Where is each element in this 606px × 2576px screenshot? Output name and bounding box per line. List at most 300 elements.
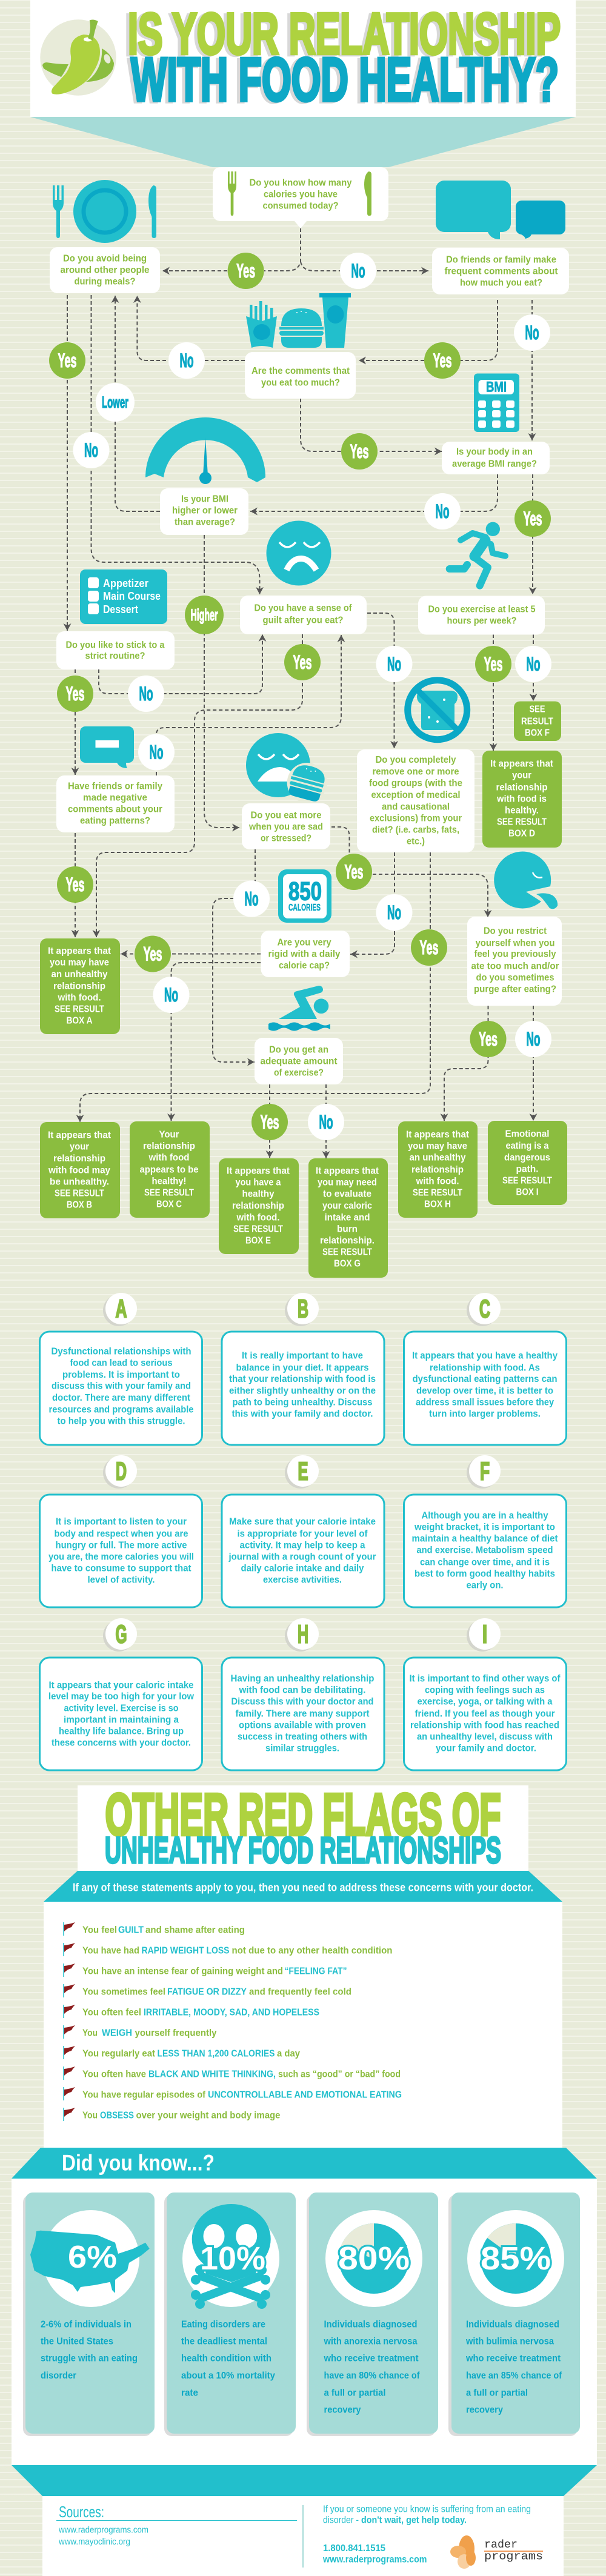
question: restrict or purge: yourself when you xyxy=(475,938,555,949)
result: box E: you have a xyxy=(235,1178,281,1187)
card: result I: It is important to find other ways of xyxy=(410,1673,561,1684)
logo: rader programs xyxy=(450,2535,543,2569)
card: result F: weight bracket, it is important to xyxy=(414,1522,555,1533)
result: box E: BOX E xyxy=(245,1236,271,1246)
question: remove food groups: diet? (i.e. carbs, fats, xyxy=(372,825,459,835)
icon: US map xyxy=(30,2231,150,2293)
card: result I: relationship with food has reached xyxy=(410,1721,559,1730)
answer: no xyxy=(514,314,550,351)
list item 1: You feel xyxy=(82,1925,117,1935)
icon: swimmer xyxy=(268,986,330,1031)
question: adequate exercise xyxy=(255,1038,343,1084)
result: box E xyxy=(219,1158,299,1254)
card: result C: develop over time, it is better to xyxy=(416,1386,553,1396)
result: box D: with food is xyxy=(496,794,547,805)
badge: letter H: H xyxy=(298,1620,308,1648)
question: guilt after eating: guilt after you eat? xyxy=(263,616,343,625)
card: 10 percent: health condition with xyxy=(181,2353,271,2364)
answer: yes: Yes xyxy=(484,653,503,675)
call to action: don't wait, get help today. xyxy=(361,2515,467,2525)
pie chart: 80 percent xyxy=(338,2223,410,2294)
card: result I: coping with feelings such as xyxy=(425,1685,545,1695)
card: result B: this with your family and doctor. xyxy=(231,1409,373,1419)
question: restrict or purge: purge after eating? xyxy=(474,984,556,995)
card: result D: you are, the more calories you will xyxy=(48,1552,194,1562)
list item 7: You regularly eat xyxy=(82,2049,156,2059)
card: result E xyxy=(222,1495,384,1607)
result: box H: BOX H xyxy=(424,1200,451,1209)
card: result I: exercise, yoga, or talking with a xyxy=(417,1696,553,1707)
list item 4: You sometimes feel xyxy=(82,1987,165,1997)
call to action: If you or someone you know is suffering from an eating xyxy=(323,2505,531,2514)
list item 6: WEIGH xyxy=(102,2028,132,2038)
question: adequate exercise: adequate amount xyxy=(261,1057,338,1066)
question: average BMI range: Is your body in an xyxy=(456,447,533,457)
answer: yes: Yes xyxy=(479,1028,498,1050)
question: restrict or purge: feel you previously xyxy=(474,949,556,960)
card: result C xyxy=(404,1332,566,1445)
result: box A: SEE RESULT xyxy=(55,1004,104,1014)
card: 10 percent: the deadliest mental xyxy=(181,2336,267,2347)
answer: yes: Yes xyxy=(293,651,311,673)
card: result G: important in maintaining a xyxy=(64,1715,179,1725)
answer: no xyxy=(340,253,376,289)
card: result G: these concerns with your doctor. xyxy=(52,1738,191,1748)
answer: yes xyxy=(57,866,93,903)
answer: yes: Yes xyxy=(236,260,255,282)
result: box H: with food. xyxy=(416,1177,459,1186)
answer: no xyxy=(168,342,205,379)
question: remove food groups: food groups (with the xyxy=(369,778,462,789)
title xyxy=(128,1,561,114)
card: 85 percent: recovery xyxy=(466,2405,503,2415)
question: friends comment on eating xyxy=(432,248,569,294)
question: remove food groups: etc.) xyxy=(407,836,425,847)
answer: yes xyxy=(57,676,93,712)
result: box H xyxy=(398,1121,478,1218)
answer: no xyxy=(128,676,164,712)
banner: address concerns with doctor xyxy=(44,1871,562,1902)
result: box C: with food xyxy=(148,1152,189,1163)
question: strict routine: Do you like to stick to a xyxy=(65,640,165,651)
result: box I: path. xyxy=(516,1164,538,1174)
question: negative comments xyxy=(56,775,175,832)
result: box I: dangerous xyxy=(504,1152,550,1163)
result: box F: SEE xyxy=(530,704,545,715)
list item 9 xyxy=(64,2087,402,2100)
answer: no xyxy=(73,432,109,468)
card: result D: hungry or full. The more active xyxy=(56,1540,187,1551)
list item 1: and shame after eating xyxy=(145,1925,245,1935)
list item 4: and frequently feel cold xyxy=(249,1987,351,1997)
badge: letter B: B xyxy=(298,1294,308,1323)
list item 3: “FEELING FAT” xyxy=(285,1967,347,1976)
answer: no: No xyxy=(387,653,401,675)
list item 6 xyxy=(64,2025,217,2039)
answer: no xyxy=(376,894,412,931)
icon: sad face xyxy=(267,521,331,585)
card: result I: your family and doctor. xyxy=(436,1744,536,1753)
card: result B: path to being unhealthy. Discuss xyxy=(233,1397,373,1408)
card: result H: Having an unhealthy relationship xyxy=(230,1673,375,1684)
card: result F: and exercise. Metabolism speed xyxy=(417,1545,553,1556)
icon: negative comment bubble xyxy=(80,726,134,768)
sources: www.raderprograms.com xyxy=(58,2525,148,2535)
question: strict routine xyxy=(56,631,175,669)
card: 85 percent: have an 85% chance of xyxy=(466,2371,562,2381)
result: box F xyxy=(514,702,561,741)
result: box G: BOX G xyxy=(334,1259,361,1269)
icon: vomiting face xyxy=(494,852,558,909)
question: guilt after eating xyxy=(240,596,367,634)
question: avoid other people xyxy=(50,247,160,293)
card: result I xyxy=(404,1658,566,1770)
card: 10 percent xyxy=(164,2193,296,2436)
icon: 850 calories: CALORIES xyxy=(288,903,321,913)
card: result C: relationship with food. As xyxy=(430,1363,540,1373)
result: box H: SEE RESULT xyxy=(413,1187,462,1198)
icon: fast food xyxy=(246,293,351,348)
list item 8: such as “good” or “bad” food xyxy=(278,2070,401,2079)
question: comments too much: you eat too much? xyxy=(261,378,340,388)
result: box A: relationship xyxy=(53,981,105,991)
answer: no: No xyxy=(387,901,401,923)
answer: no: No xyxy=(179,350,194,371)
answer: yes: Yes xyxy=(261,1111,279,1133)
question: avoid other people: Do you avoid being xyxy=(63,253,147,264)
card: 85 percent: Individuals diagnosed xyxy=(466,2319,559,2330)
badge: letter C xyxy=(467,1293,501,1326)
badge: letter F: F xyxy=(480,1456,490,1486)
answer: yes xyxy=(341,433,378,470)
result: box A: It appears that xyxy=(48,946,112,956)
panel: did you know xyxy=(12,2179,597,2465)
list item 7: LESS THAN 1,200 CALORIES xyxy=(158,2049,275,2059)
result: box H: you may have xyxy=(408,1141,467,1151)
question: rigid calorie cap: Are you very xyxy=(278,938,331,948)
result: box A: with food. xyxy=(58,992,101,1003)
card: 85 percent: who receive treatment xyxy=(465,2353,561,2364)
result: box E: It appears that xyxy=(227,1166,290,1177)
answer: yes xyxy=(514,500,551,537)
question: eat more when sad: Do you eat more xyxy=(251,811,322,820)
question: guilt after eating: Do you have a sense of xyxy=(255,603,352,613)
question: strict routine: strict routine? xyxy=(85,651,145,662)
icon: green knife xyxy=(364,171,371,216)
answer: yes xyxy=(470,1021,507,1057)
question: friends comment on eating: Do friends or family make xyxy=(446,254,556,265)
question: restrict or purge xyxy=(467,917,562,1006)
answer: yes xyxy=(424,342,461,379)
result: box G: relationship. xyxy=(320,1236,375,1246)
result: box B: SEE RESULT xyxy=(55,1189,104,1198)
badge: letter F xyxy=(467,1455,501,1489)
card: result G xyxy=(40,1658,202,1770)
answer: no xyxy=(515,646,551,682)
answer: higher: Higher xyxy=(190,606,218,624)
icon: 850 calories xyxy=(278,869,331,923)
answer: yes: Yes xyxy=(65,683,85,705)
result: box G: intake and xyxy=(325,1213,370,1223)
result: box C: relationship xyxy=(143,1141,195,1151)
result: box B: be unhealthy. xyxy=(50,1177,109,1187)
question: friends comment on eating: frequent comments about xyxy=(445,267,558,276)
card: result H: success in treating others with xyxy=(238,1731,367,1742)
answer: no xyxy=(308,1104,344,1140)
result: box B: with food may xyxy=(48,1166,110,1175)
badge: letter H xyxy=(285,1618,319,1651)
card: result G: It appears that your caloric intake xyxy=(48,1681,194,1690)
badge: letter B xyxy=(285,1293,319,1326)
card: 6 percent xyxy=(23,2193,155,2436)
card: result F: can change over time, and it is xyxy=(420,1557,550,1568)
answer: yes xyxy=(228,253,264,289)
call to action: 1.800.841.1515 xyxy=(323,2543,385,2554)
card: result C: It appears that you have a healthy xyxy=(412,1351,558,1361)
result: box A: BOX A xyxy=(67,1015,93,1026)
card: result F: early on. xyxy=(467,1580,503,1591)
result: box C xyxy=(130,1121,210,1218)
answer: no xyxy=(515,1021,551,1057)
header panel xyxy=(30,0,576,167)
question: remove food groups: remove one or more xyxy=(372,767,459,777)
list item 5: IRRITABLE, MOODY, SAD, AND HOPELESS xyxy=(144,2008,319,2017)
result: box I: BOX I xyxy=(516,1187,538,1197)
card: result F: best to form good healthy habits xyxy=(415,1569,555,1579)
result: box D: relationship xyxy=(496,783,548,792)
question: avoid other people: around other people xyxy=(61,265,150,275)
card: result B xyxy=(222,1332,384,1445)
card: 6 percent: 6% xyxy=(68,2240,117,2275)
question: calories consumed today: Do you know how many xyxy=(250,178,352,188)
result: box A: an unhealthy xyxy=(51,969,108,980)
list item 7 xyxy=(64,2046,300,2059)
answer: yes: Yes xyxy=(350,440,368,462)
card: 10 percent: rate xyxy=(181,2388,198,2398)
banner: did you know: Did you know...? xyxy=(62,2151,215,2175)
question: negative comments: comments about your xyxy=(68,805,162,814)
card: 10 percent: Eating disorders are xyxy=(181,2319,265,2330)
question: negative comments: made negative xyxy=(83,792,147,803)
card: 85 percent xyxy=(448,2193,580,2436)
card: result B: either slightly unhealthy or on the xyxy=(229,1386,376,1396)
question: average BMI range: average BMI range? xyxy=(452,459,537,469)
question: restrict or purge: Do you restrict xyxy=(484,926,547,937)
list item 10 xyxy=(64,2108,281,2121)
panel: red flags title xyxy=(78,1781,528,1871)
result: box G: It appears that xyxy=(316,1166,379,1177)
card: 80 percent: with anorexia nervosa xyxy=(324,2336,418,2347)
card: result H: Discuss this with your doctor and xyxy=(231,1696,373,1707)
icon: menu checklist: Main Course xyxy=(103,590,161,602)
badge: letter G: G xyxy=(115,1620,127,1648)
answer: yes xyxy=(336,854,372,890)
card: result G: level may be too high for your low xyxy=(48,1691,195,1702)
panel: red flags list xyxy=(44,1902,562,2148)
card: result F: maintain a healthy balance of diet xyxy=(412,1534,558,1544)
question: negative comments: Have friends or family xyxy=(68,782,162,791)
answer: yes xyxy=(251,1104,288,1140)
answer: no xyxy=(153,977,189,1013)
card: result E: activity. It may help to keep a xyxy=(240,1540,365,1551)
card: result A: discuss this with your family and xyxy=(52,1381,191,1391)
question: BMI higher or lower: higher or lower xyxy=(172,505,238,516)
icon: runner xyxy=(450,522,505,586)
answer: yes: Yes xyxy=(419,937,439,958)
card: 10 percent: about a 10% mortality xyxy=(181,2371,275,2381)
card: result E: exercise avtivities. xyxy=(263,1575,342,1585)
result: box D: SEE RESULT xyxy=(497,817,547,828)
result: box E: SEE RESULT xyxy=(233,1224,283,1235)
question: remove food groups xyxy=(357,749,474,852)
list item 4: FATIGUE OR DIZZY xyxy=(167,1987,247,1997)
result: box G xyxy=(308,1158,388,1278)
footer band xyxy=(12,2465,597,2496)
question: negative comments: eating patterns? xyxy=(80,815,150,826)
result: box F: BOX F xyxy=(525,728,550,738)
result: box C: Your xyxy=(159,1129,179,1140)
list item 10: You xyxy=(82,2111,98,2120)
badge: letter I: I xyxy=(482,1620,487,1648)
answer: no xyxy=(138,734,175,771)
answer: yes xyxy=(411,929,447,966)
list item 4 xyxy=(64,1984,351,1997)
answer: no: No xyxy=(319,1111,333,1133)
card: result E: journal with a rough count of your xyxy=(228,1552,376,1562)
card: result D: level of activity. xyxy=(87,1575,155,1585)
result: box D: your xyxy=(512,771,531,780)
panel: footer xyxy=(42,2496,564,2576)
icon: skull and crossbones xyxy=(191,2204,271,2309)
icon: menu checklist xyxy=(80,569,167,624)
sources: Sources: xyxy=(59,2503,104,2521)
logo: chili pepper xyxy=(40,19,116,96)
card: result A xyxy=(40,1332,202,1445)
badge: letter A: A xyxy=(115,1294,127,1323)
result: box F: RESULT xyxy=(521,716,553,727)
icon: menu checklist: Appetizer xyxy=(103,577,148,589)
card: result E: daily calorie intake and daily xyxy=(241,1563,364,1574)
question: friends comment on eating: how much you eat? xyxy=(460,277,542,288)
answer: yes: Yes xyxy=(65,874,85,895)
pie chart: 85 percent xyxy=(481,2223,551,2294)
list item 6: yourself frequently xyxy=(135,2028,217,2038)
card: result G: activity level. Exercise is so xyxy=(64,1704,179,1713)
result: box G: burn xyxy=(337,1224,358,1235)
question: adequate exercise: Do you get an xyxy=(269,1044,328,1055)
logo: rader programs: programs xyxy=(484,2551,543,2563)
card: result B: balance in your diet. It appears xyxy=(236,1363,369,1373)
question: comments too much: Are the comments that xyxy=(251,366,350,376)
list item 5: You often feel xyxy=(82,2008,141,2017)
result: box H: It appears that xyxy=(406,1129,470,1140)
card: result D: It is important to listen to your xyxy=(56,1517,187,1527)
question: average BMI range xyxy=(442,442,550,474)
result: box B: relationship xyxy=(53,1154,105,1164)
question: rigid calorie cap: calorie cap? xyxy=(279,961,330,971)
list item 8: BLACK AND WHITE THINKING, xyxy=(148,2070,276,2079)
badge: letter D xyxy=(103,1455,137,1489)
card: result A: food can lead to serious xyxy=(70,1358,173,1368)
card: result E: is appropriate for your level of xyxy=(238,1529,368,1539)
card: 6 percent: struggle with an eating xyxy=(41,2353,138,2364)
result: box H: an unhealthy xyxy=(410,1152,466,1163)
card: 80 percent: have an 80% chance of xyxy=(324,2371,420,2381)
badge: letter D: D xyxy=(116,1456,127,1486)
card: result A: doctor. There are many different xyxy=(52,1393,191,1403)
answer: higher xyxy=(185,596,224,634)
result: box I xyxy=(488,1121,567,1205)
question: calories consumed today xyxy=(213,167,388,228)
list item 7: a day xyxy=(277,2049,300,2059)
card: result G: healthy life balance. Bring up xyxy=(59,1727,184,1736)
card: result A: Dysfunctional relationships with xyxy=(51,1346,191,1357)
answer: yes: Yes xyxy=(344,861,364,883)
result: box C: BOX C xyxy=(156,1200,182,1209)
question: remove food groups: exclusions) from your xyxy=(370,813,462,824)
result: box E: with food. xyxy=(236,1213,280,1223)
result: box C: appears to be xyxy=(139,1164,199,1175)
result: box E: relationship xyxy=(232,1201,284,1211)
result: box C: healthy! xyxy=(152,1177,187,1186)
answer: no xyxy=(233,881,270,917)
icon: BMI calculator xyxy=(474,373,519,432)
answer: no: No xyxy=(351,260,365,282)
card: 80 percent xyxy=(307,2193,438,2436)
logo: rader programs: rader xyxy=(484,2539,518,2551)
card: result F xyxy=(404,1495,566,1607)
list item 10: over your weight and body image xyxy=(136,2111,281,2120)
question: restrict or purge: do you sometimes xyxy=(476,973,554,983)
icon: no bread xyxy=(408,680,467,740)
icon: 850 calories: 850 xyxy=(288,877,322,906)
card: 80 percent: Individuals diagnosed xyxy=(324,2319,417,2330)
pie chart: 85 percent: 85% xyxy=(481,2240,551,2277)
list item 2 xyxy=(64,1943,393,1956)
card: result C: dysfunctional eating patterns can xyxy=(412,1374,558,1384)
question: BMI higher or lower xyxy=(160,488,248,535)
call to action: www.raderprograms.com xyxy=(322,2554,427,2565)
result: box D: It appears that xyxy=(490,759,554,769)
result: box H: relationship xyxy=(411,1164,464,1175)
answer: yes xyxy=(49,342,85,379)
card: result E: Make sure that your calorie intake xyxy=(229,1517,376,1527)
result: box D: BOX D xyxy=(508,829,535,838)
result: box G: SEE RESULT xyxy=(322,1247,372,1258)
answer: no: No xyxy=(149,742,164,763)
card: result C: turn into larger problems. xyxy=(429,1409,541,1419)
answer: no xyxy=(376,646,412,682)
answer: no xyxy=(424,493,461,529)
answer: lower: Lower xyxy=(102,393,128,411)
result: box D xyxy=(482,751,562,848)
result: box I: Emotional xyxy=(505,1129,549,1139)
card: result I: friend. If you feel as though your xyxy=(415,1708,555,1719)
answer: no: No xyxy=(525,322,539,344)
answer: no: No xyxy=(84,439,98,461)
card: 80 percent: who receive treatment xyxy=(324,2353,419,2364)
icon: speech bubbles xyxy=(436,181,565,239)
card: 6 percent: 2-6% of individuals in xyxy=(41,2319,132,2330)
question: remove food groups: Do you completely xyxy=(376,755,456,765)
badge: letter E: E xyxy=(298,1456,308,1486)
card: 6 percent: the United States xyxy=(41,2336,113,2347)
card: result H: options available with proven xyxy=(239,1721,366,1730)
question: comments too much xyxy=(245,352,356,399)
list item 9: You have regular episodes of xyxy=(82,2090,206,2100)
list item 3 xyxy=(64,1964,347,1977)
card: 6 percent: disorder xyxy=(41,2371,76,2381)
